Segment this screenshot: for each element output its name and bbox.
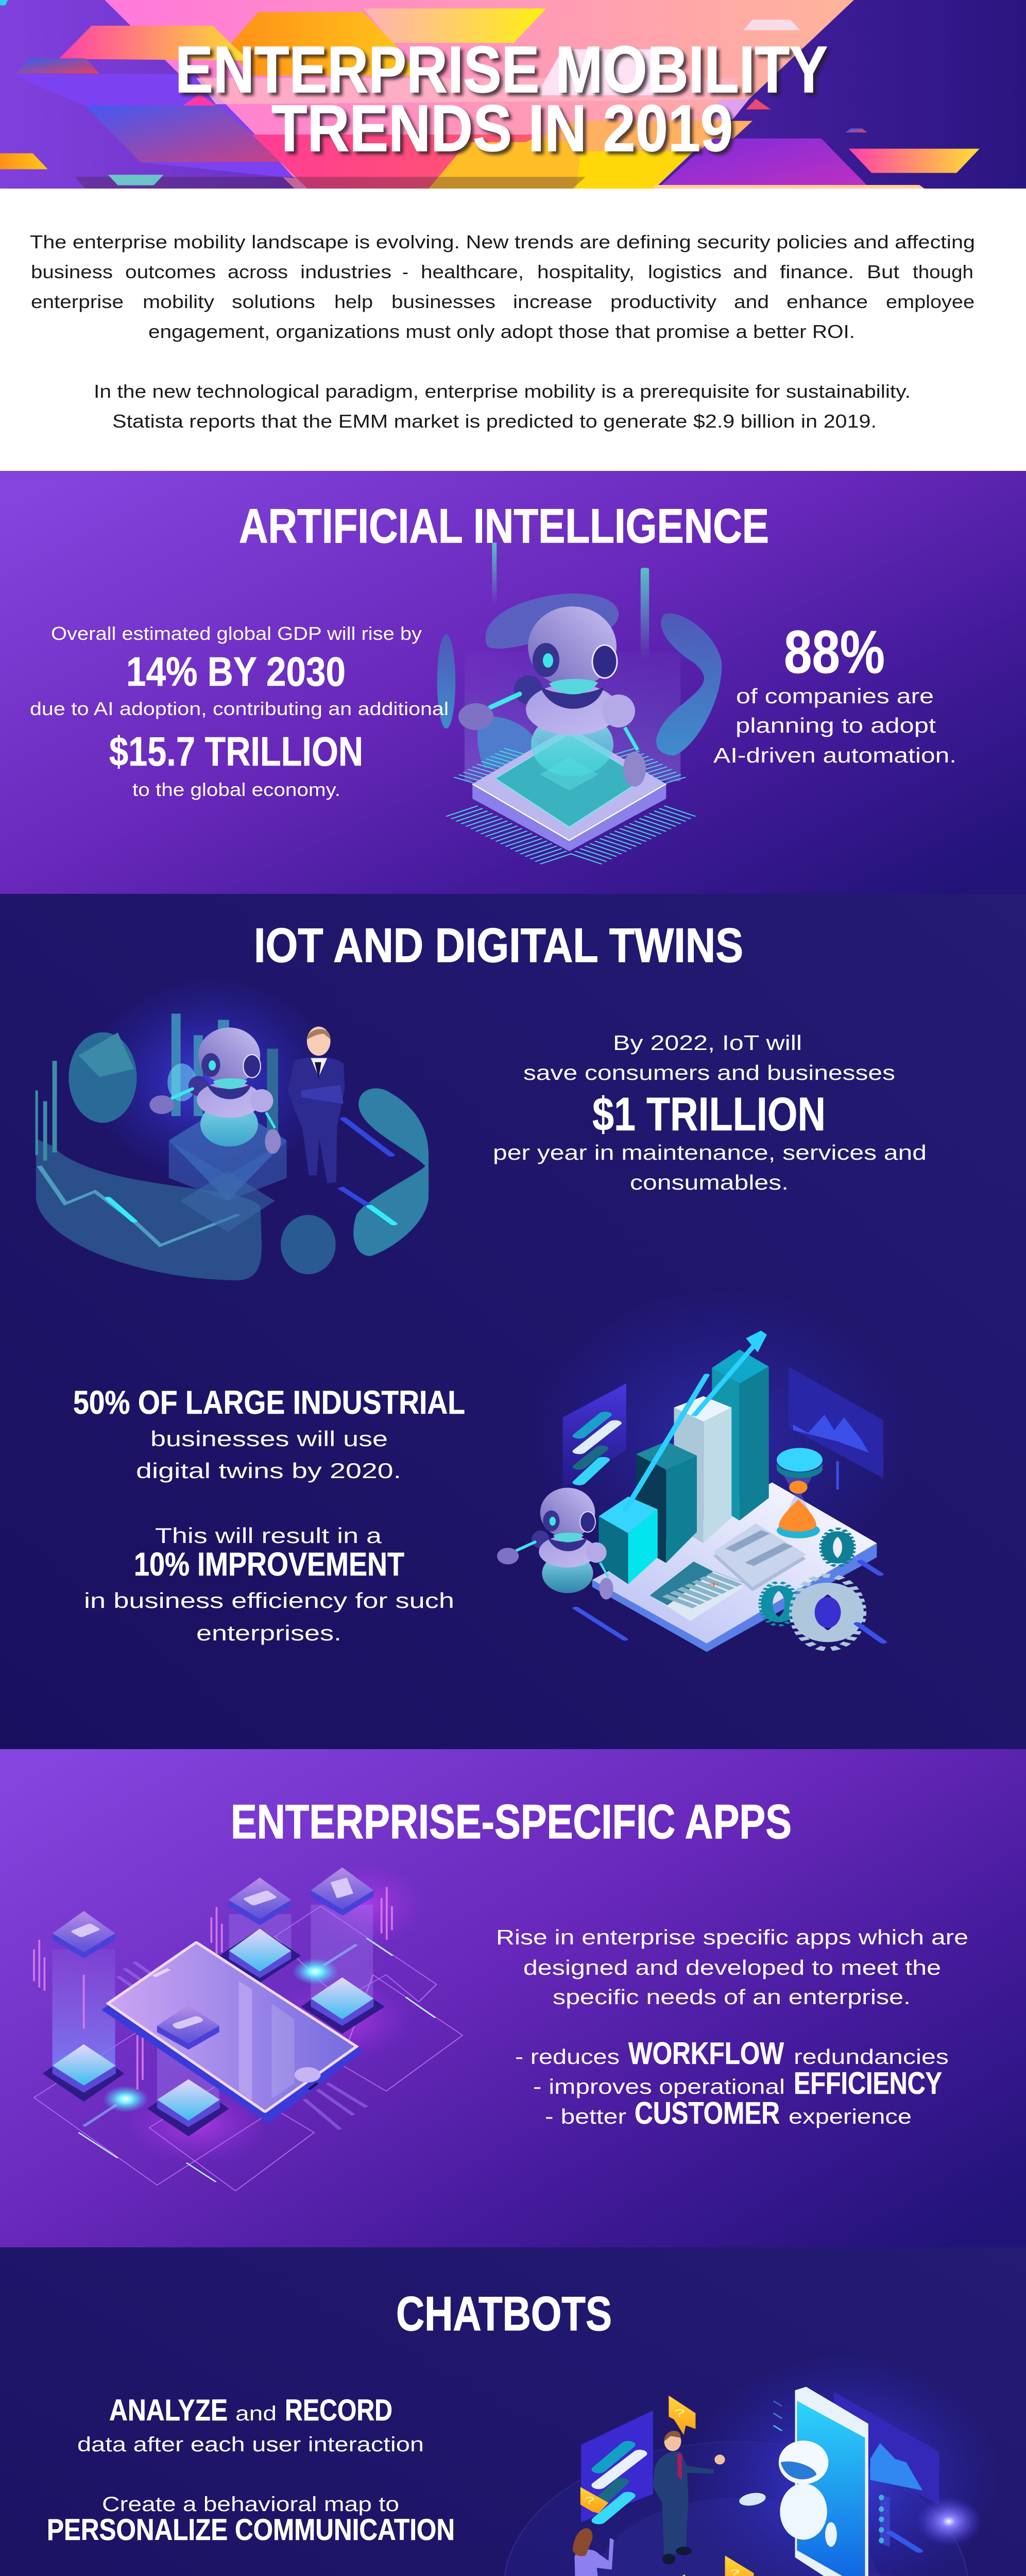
heading: IOT AND DIGITAL TWINS [254,918,743,972]
heading: ARTIFICIAL INTELLIGENCE [239,499,769,553]
digital twins statistic: This will result in a [155,1523,382,1548]
intro paragraph one: The enterprise mobility landscape is evolving. New trends are defining security policies and affecting [30,231,975,252]
heading: ENTERPRISE-SPECIFIC APPS [231,1794,792,1849]
panel: title banner [0,0,1026,189]
GDP statistic text [30,623,449,800]
speech bubble one: ? [674,2408,685,2419]
digital twins statistic: in business efficiency for such [84,1588,454,1613]
illustration: phone and floating app tiles [34,1863,463,2191]
intro paragraph one: and [734,291,769,312]
digital twins statistic: 50% OF LARGE INDUSTRIAL [73,1384,465,1421]
illustration: people around chatbot phone [504,2353,1001,2576]
description text: designed and developed to meet the [523,1956,941,1979]
heading: CHATBOTS [396,2286,612,2341]
speech bubble two [580,2487,608,2513]
GDP statistic text: $15.7 TRILLION [109,728,363,774]
intro paragraph two [94,381,911,432]
benefit: personalize communication: PERSONALIZE COMMUNICATION [47,2513,455,2547]
intro paragraph one: But [867,261,899,282]
intro paragraph one: solutions [232,291,315,312]
intro paragraph one: finance. [780,261,854,282]
GDP statistic text: to the global economy. [132,779,340,800]
benefit list: WORKFLOW [628,2036,784,2071]
benefit list: experience [789,2105,912,2128]
benefit list [515,2036,949,2130]
intro paragraph one: help [334,291,373,312]
description text: specific needs of an enterprise. [553,1985,911,2009]
savings statistic: $1 TRILLION [592,1088,826,1141]
description text: Rise in enterprise specific apps which are [496,1925,968,1949]
panel: IoT and digital twins [0,894,1026,1749]
illustration: isometric chart platform [497,1289,916,1652]
digital twins statistic [73,1384,465,1645]
savings statistic: By 2022, IoT will [613,1031,802,1055]
digital twins statistic: 10% IMPROVEMENT [134,1546,404,1583]
intro paragraph one: industries [300,261,391,282]
benefit: analyze and record [77,2394,424,2456]
benefit list: - reduces [515,2045,620,2069]
person: man in suit [653,2431,725,2564]
88 percent statistic [713,618,956,767]
speech bubble four [657,2574,685,2576]
savings statistic: save consumers and businesses [523,1061,895,1084]
intro paragraph one: engagement, organizations must only adopt those that promise a better ROI. [148,321,855,342]
savings statistic: consumables. [630,1171,789,1194]
title [175,33,828,165]
intro paragraph one: and [733,261,767,282]
88 percent statistic: AI-driven automation. [713,743,956,767]
panel: enterprise-specific apps [0,1749,1026,2248]
benefit: personalize communication: Create a behavioral map to [102,2493,399,2516]
intro paragraph one: outcomes [125,261,216,282]
panel: introduction [0,189,1026,471]
speech bubble two: ? [584,2495,594,2506]
intro paragraph one: businesses [391,291,495,312]
intro paragraph one: business [31,261,113,282]
88 percent statistic: of companies are [736,684,934,708]
title: TRENDS IN 2019 [271,92,733,165]
intro paragraph one: productivity [610,291,716,312]
illustration: robot and businessman [36,977,429,1280]
digital twins statistic: businesses will use [150,1427,388,1451]
illustration: isometric chart platform: + [708,1580,720,1589]
88 percent statistic: planning to adopt [736,714,936,737]
intro paragraph one [30,231,975,342]
benefit list: - better [545,2105,626,2128]
intro paragraph one: logistics [648,261,722,282]
speech bubble three [725,2555,754,2576]
description text [496,1925,968,2009]
benefit: analyze and record: data after each user interaction [77,2433,424,2456]
intro paragraph one: employee [886,291,974,312]
intro paragraph two: In the new technological paradigm, enterprise mobility is a prerequisite for sustainability. [94,381,911,402]
benefit list: CUSTOMER [635,2096,780,2130]
person: woman in violet [573,2528,614,2576]
88 percent statistic: 88% [784,618,885,686]
businessman [288,1027,345,1183]
savings statistic: per year in maintenance, services and [493,1141,927,1164]
intro paragraph one: increase [513,291,592,312]
benefit: analyze and record: and [235,2402,277,2425]
intro paragraph two: Statista reports that the EMM market is predicted to generate $2.9 billion in 2019. [112,411,877,432]
banner artwork [0,0,1026,189]
digital twins statistic: digital twins by 2020. [136,1459,401,1483]
title: ENTERPRISE MOBILITY [175,33,828,107]
GDP statistic text: due to AI adoption, contributing an additional [30,698,449,719]
panel: artificial intelligence [0,471,1026,894]
intro paragraph one: healthcare, [421,261,524,282]
speech bubble one [669,2396,695,2435]
illustration: robot on chip [437,543,722,861]
benefit: analyze and record: ANALYZE [109,2394,228,2427]
savings statistic [493,1031,927,1194]
digital twins statistic: enterprises. [196,1621,341,1645]
GDP statistic text: Overall estimated global GDP will rise by [51,623,422,644]
intro paragraph one: enhance [786,291,868,312]
intro paragraph one: mobility [143,291,214,312]
intro paragraph one: enterprise [31,291,124,312]
intro paragraph one: though [913,261,973,282]
intro paragraph one: - [402,261,408,282]
benefit: personalize communication [47,2493,455,2547]
benefit list: redundancies [794,2045,949,2069]
benefit list: EFFICIENCY [794,2066,942,2100]
intro paragraph one: hospitality, [537,261,635,282]
panel: chatbots [0,2247,1026,2576]
benefit: analyze and record: RECORD [285,2394,392,2427]
GDP statistic text: 14% BY 2030 [126,649,346,694]
intro paragraph one: across [228,261,288,282]
benefit list: - improves operational [533,2075,785,2098]
